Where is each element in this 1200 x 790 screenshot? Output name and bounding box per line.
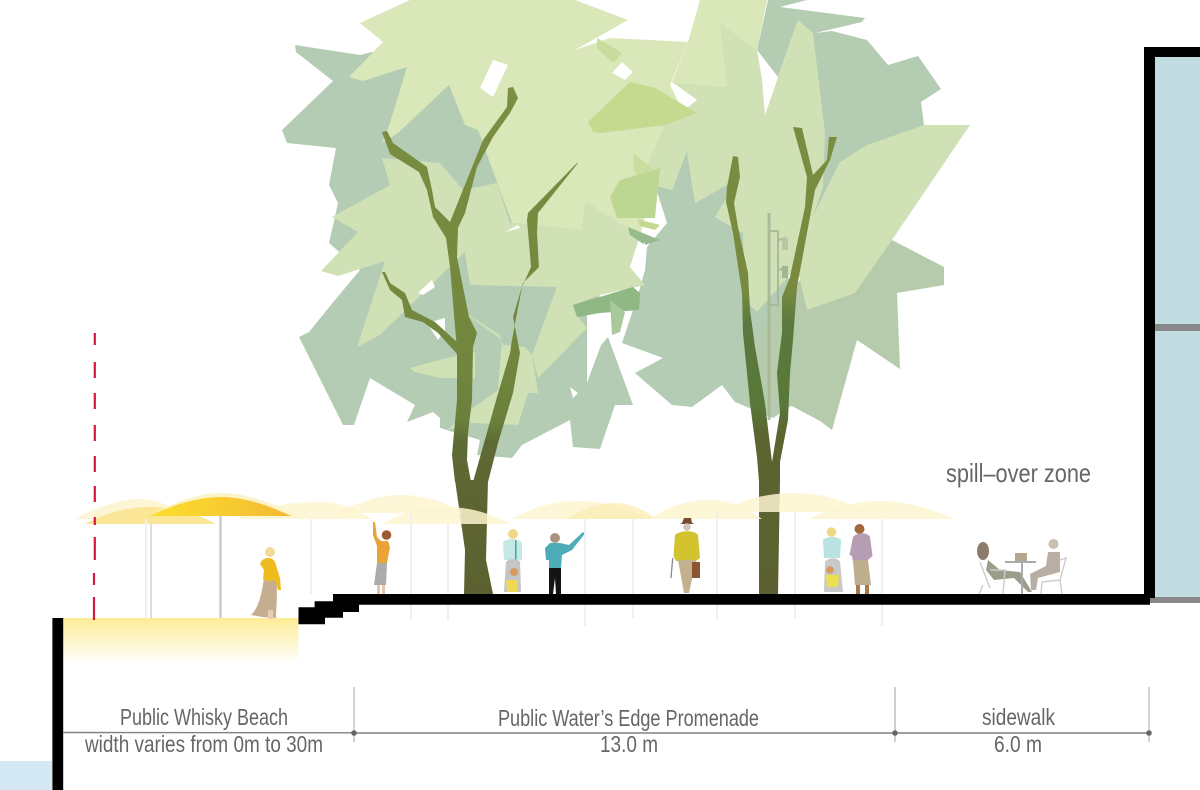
red boundary line [93,333,96,620]
lamp post behind right tree [769,213,788,420]
label: promenade: Public Water’s Edge Promenade [498,705,759,731]
building on the right [1144,47,1200,604]
people at cafe table [977,539,1066,594]
annotation: spill-over zone: spill–over zone [946,458,1091,488]
public beach sand [63,618,298,661]
person: man in mauve shirt [850,524,872,594]
label: sidewalk: sidewalk [982,704,1055,730]
label: promenade [498,705,759,757]
ground and steps [298,594,1150,624]
label: sidewalk: 6.0 m [994,731,1042,757]
label: promenade: 13.0 m [600,731,658,757]
umbrellas [75,493,954,524]
dimension line [63,687,1152,742]
person: woman pointing up [373,522,391,594]
person: man in teal shirt [545,532,584,594]
person: man in yellow coat [671,518,700,593]
umbrella poles [146,512,882,626]
tree canopies [282,0,970,458]
person: woman with stroller [503,529,522,592]
right tree trunk [726,127,837,594]
person: second woman with stroller [823,527,843,592]
seawall [52,618,63,790]
person: beach woman [251,547,281,619]
label: sidewalk [982,704,1055,757]
left tree trunk [382,87,578,594]
label: beach [84,704,323,757]
label: beach: Public Whisky Beach [120,704,288,730]
water [0,761,52,790]
label: beach: width varies from 0m to 30m [84,731,323,757]
